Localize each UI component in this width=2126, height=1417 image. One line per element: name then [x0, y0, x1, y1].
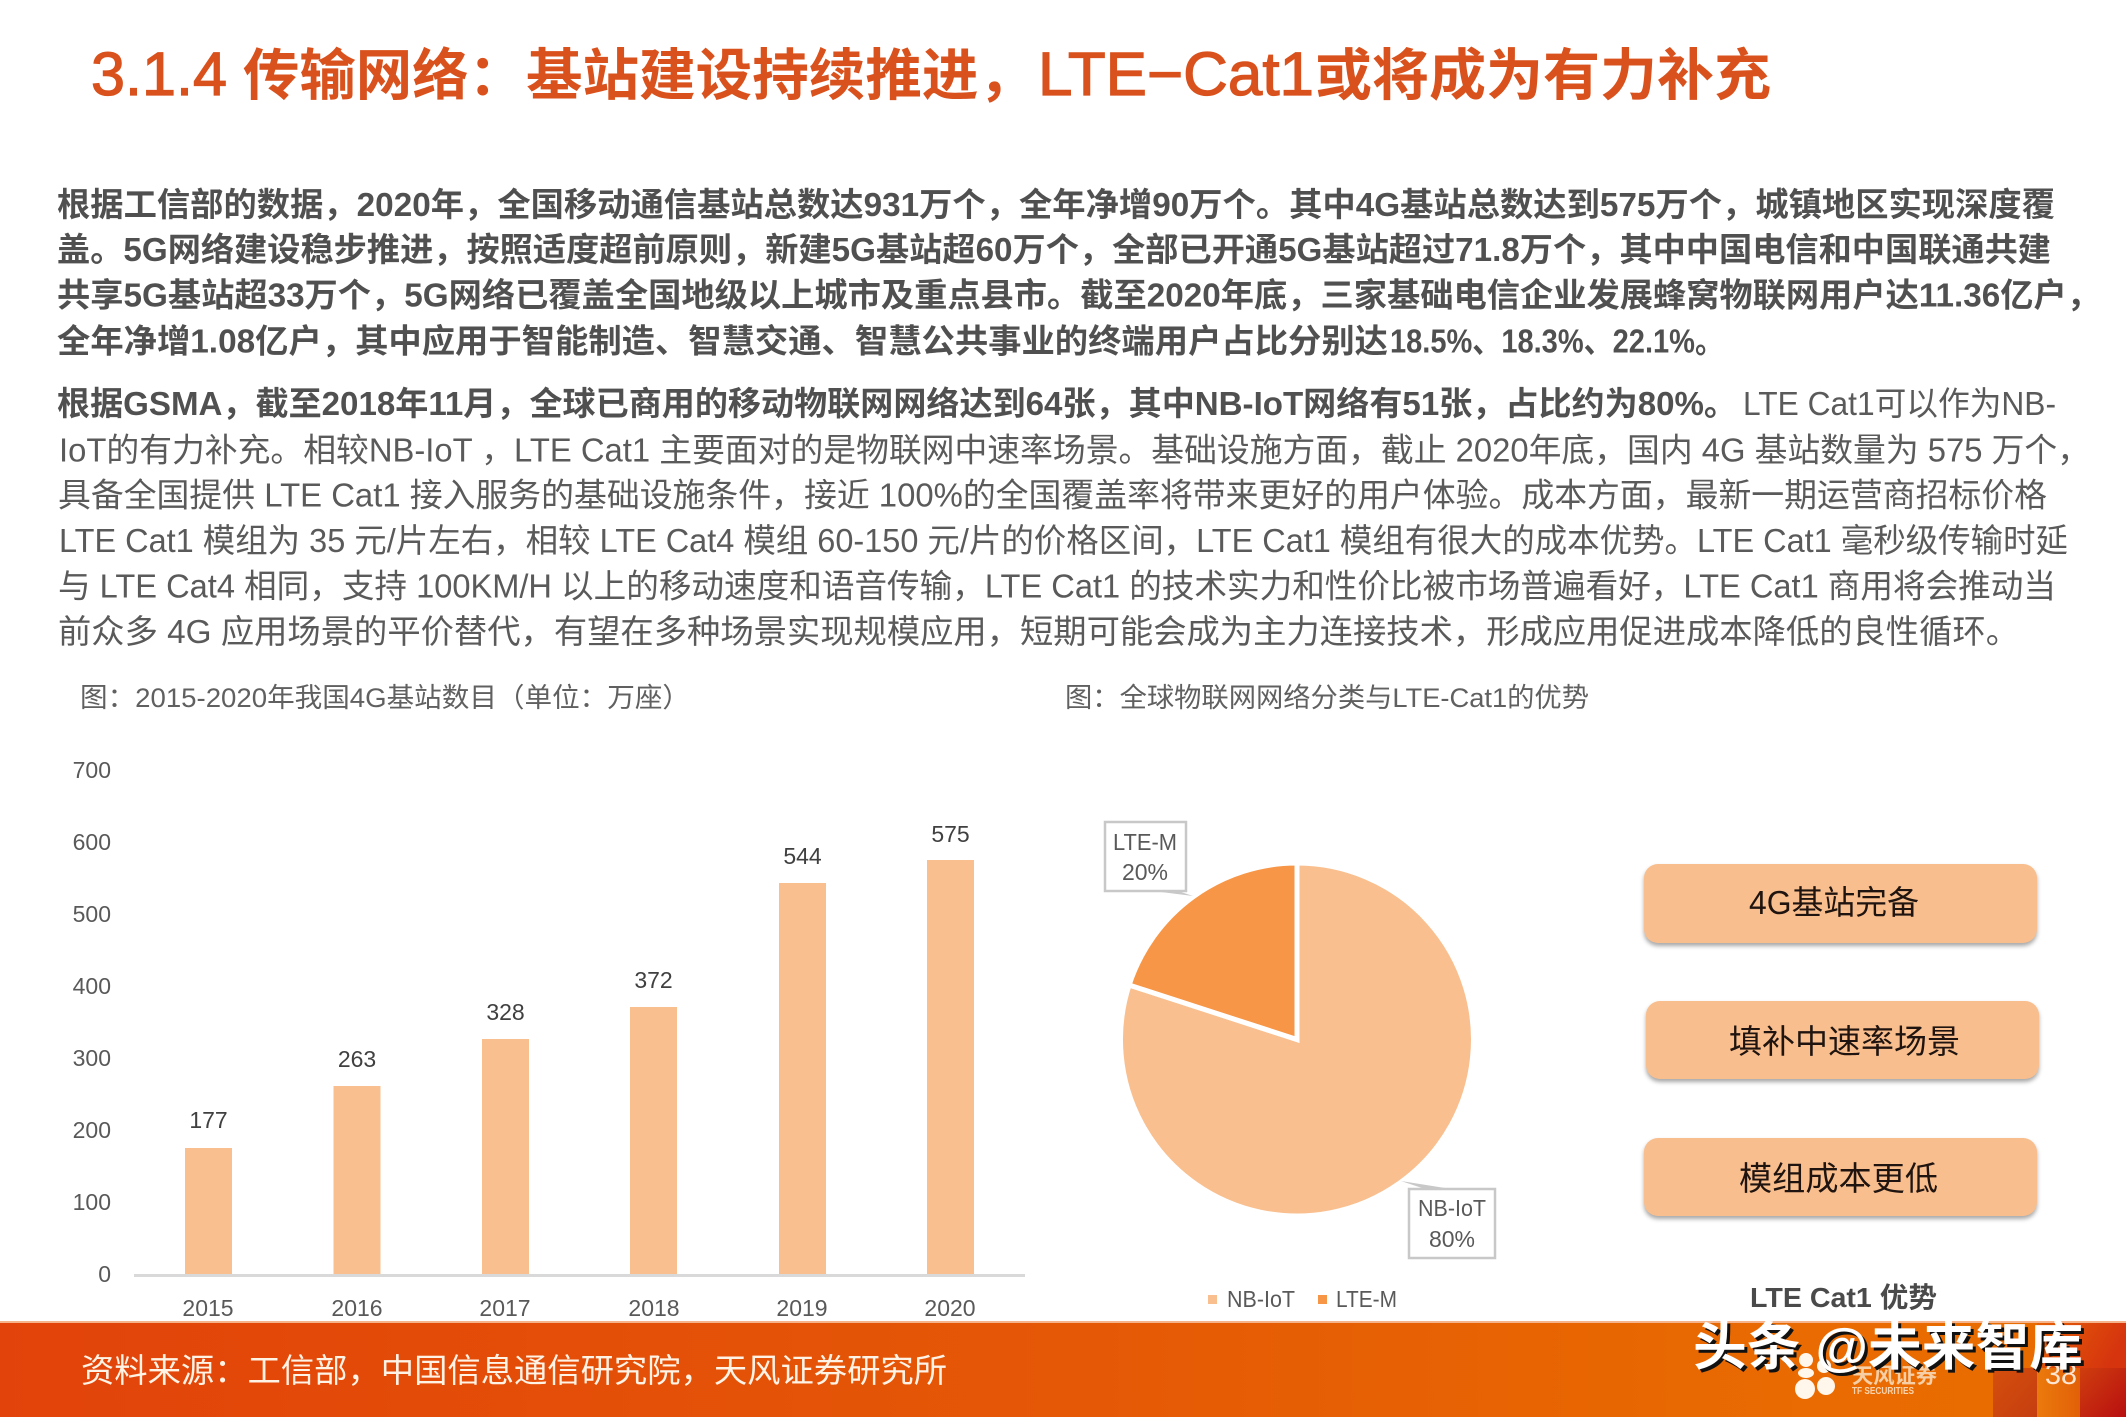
category labels: 2020: [924, 1295, 976, 1321]
text block: paragraph one: 全年净增1.08亿户，其中应用于智能制造、智慧交通、智慧公共事业的终端用户占比分别达: [57, 322, 1388, 360]
y axis labels: 500: [73, 901, 111, 927]
watermark: 头条 @未来智库: [1693, 1319, 2083, 1377]
button: 4G base stations ready: [1644, 864, 2037, 943]
y axis labels: 0: [98, 1261, 111, 1287]
logo: TF Securities: 天风证券: [1852, 1365, 1937, 1388]
legend: [1208, 1286, 1397, 1312]
pie chart: global IoT network split: [1105, 822, 1495, 1312]
text block: paragraph one: 共享5G基站超33万个，5G网络已覆盖全国地级以上城市及重点县市。截至2020年底，三家基础电信企业发展蜂窝物联网用户达11.36亿户，: [57, 276, 2100, 314]
title: 或将成为有力补充: [1315, 44, 1771, 107]
page number: 38: [2045, 1359, 2077, 1391]
text block: paragraph one: 根据工信部的数据，2020年，全国移动通信基站总数达931万个，全年净增90万个。其中4G基站总数达到575万个，城镇地区实现深度覆: [57, 186, 2055, 223]
y axis labels: 300: [73, 1045, 111, 1071]
callout: NB-IoT: [1401, 1181, 1495, 1258]
title: 传输网络：: [243, 44, 525, 107]
text block: paragraph two: LTE Cat1 模组为 35 元/片左右，相较 LTE Cat4 模组 60-150 元/片的价格区间，LTE Cat1 模组有很大的成本优势。LTE Cat1 毫秒级传输时延: [59, 522, 2068, 559]
data labels: 328: [486, 999, 525, 1025]
legend: NB-IoT: [1227, 1286, 1295, 1312]
callout: LTE-M: 20%: [1122, 859, 1168, 885]
y axis labels: 100: [73, 1189, 111, 1215]
y axis labels: 600: [73, 829, 111, 855]
button: lower module cost: 模组成本更低: [1739, 1160, 1938, 1197]
y axis labels: [73, 757, 111, 1287]
callout: LTE-M: [1105, 822, 1193, 896]
footer band: [0, 1321, 2126, 1417]
legend: LTE-M: [1336, 1286, 1397, 1312]
panel caption: LTE Cat1 优势: [1750, 1282, 1937, 1313]
text block: paragraph two: 与 LTE Cat4 相同，支持 100KM/H 以上的移动速度和语音传输，LTE Cat1 的技术实力和性价比被市场普遍看好，LTE Cat1 商用将会推动当: [58, 568, 2056, 604]
slice: NB-IoT 80%: [1120, 863, 1473, 1216]
title: 基站建设持续推进，: [526, 44, 1035, 107]
y axis labels: 200: [73, 1117, 111, 1143]
slice: LTE-M 20%: [1129, 863, 1297, 1040]
callout: NB-IoT: 80%: [1429, 1226, 1475, 1252]
button: mid-rate scenarios: [1646, 1001, 2039, 1079]
logo: TF Securities: TF SECURITIES: [1852, 1386, 1914, 1397]
button: lower module cost: [1644, 1138, 2037, 1216]
logo: TF Securities: [1795, 1353, 1937, 1399]
heading: bar chart caption: 图：2015-2020年我国4G基站数目（单位：万座）: [80, 683, 690, 713]
button: mid-rate scenarios: 填补中速率场景: [1729, 1023, 1960, 1060]
text block: paragraph two: 根据GSMA，截至2018年11月，全球已商用的移动物联网网络达到64张，其中NB-IoT网络有51张，占比约为80%。: [57, 385, 1737, 422]
data labels: 575: [931, 821, 970, 847]
category labels: 2017: [479, 1295, 531, 1321]
category labels: 2016: [331, 1295, 383, 1321]
button: 4G base stations ready: 4G基站完备: [1749, 884, 1919, 921]
category labels: [182, 1295, 976, 1321]
y axis labels: 700: [73, 757, 111, 783]
panel: LTE Cat1 advantages: [1644, 864, 2039, 1313]
title: LTE−Cat1: [1038, 40, 1314, 108]
source note: 资料来源：工信部，中国信息通信研究院，天风证券研究所: [81, 1352, 947, 1389]
text block: paragraph two: 具备全国提供 LTE Cat1 接入服务的基础设施条件，接近 100%的全国覆盖率将带来更好的用户体验。成本方面，最新一期运营商招标价格: [58, 476, 2047, 514]
text block: paragraph one: [57, 186, 2100, 360]
category labels: 2018: [628, 1295, 680, 1321]
callout: LTE-M: LTE-M: [1113, 829, 1177, 855]
text block: paragraph two: 前众多 4G 应用场景的平价替代，有望在多种场景实现规模应用，短期可能会成为主力连接技术，形成应用促进成本降低的良性循环。: [58, 613, 2019, 650]
text block: paragraph one: 18.5%、18.3%、22.1%。: [1390, 322, 1724, 360]
data labels: 544: [783, 843, 822, 869]
callout: NB-IoT: NB-IoT: [1418, 1195, 1486, 1221]
data labels: 177: [189, 1107, 228, 1133]
y axis labels: 400: [73, 973, 111, 999]
text block: paragraph two: LTE Cat1可以作为NB-: [1743, 385, 2056, 422]
category labels: 2019: [776, 1295, 828, 1321]
data labels: [189, 821, 970, 1133]
title: [91, 40, 1771, 108]
title: 3.1.4: [91, 40, 227, 108]
data labels: 263: [338, 1046, 376, 1072]
text block: paragraph two: IoT的有力补充。相较NB-IoT ，LTE Cat1 主要面对的是物联网中速率场景。基础设施方面，截止 2020年底，国内 4G 基站数量为 575 万个，: [59, 432, 2090, 468]
text block: paragraph one: 盖。5G网络建设稳步推进，按照适度超前原则，新建5G基站超60万个，全部已开通5G基站超过71.8万个，其中中国电信和中国联通共建: [57, 231, 2051, 268]
heading: pie chart caption: 图：全球物联网网络分类与LTE-Cat1的优势: [1065, 683, 1589, 713]
category labels: 2015: [182, 1295, 234, 1321]
text block: paragraph two: [57, 385, 2090, 650]
bars: [185, 860, 974, 1275]
data labels: 372: [634, 967, 673, 993]
bar chart: 4G base stations 2015-2020: [73, 757, 1025, 1321]
